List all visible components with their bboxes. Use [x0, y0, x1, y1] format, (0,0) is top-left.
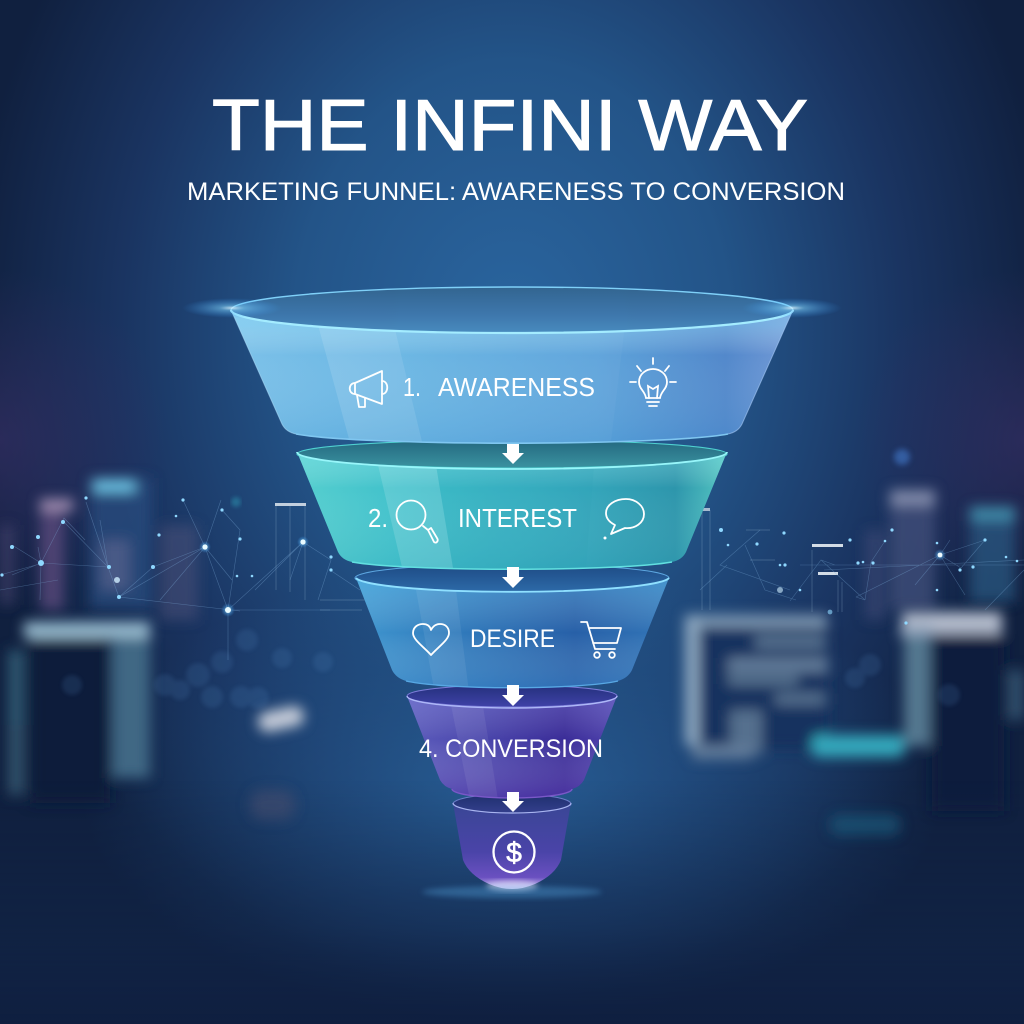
funnel stage 3: desire [354, 568, 670, 688]
bokeh lights [62, 629, 960, 709]
funnel stage 2: interest [297, 440, 727, 580]
icon: magnifying glass [396, 500, 438, 543]
network lines [0, 500, 360, 660]
icon: dollar coin: $ [506, 837, 522, 868]
blurred buildings [0, 478, 1015, 620]
label: awareness: AWARENESS [438, 372, 595, 402]
label: number 1: 1. [403, 372, 421, 402]
subtitle: MARKETING FUNNEL: AWARENESS TO CONVERSION [187, 178, 845, 206]
icon: heart [413, 624, 449, 655]
arrows between stages [502, 444, 524, 812]
label: interest: INTEREST [458, 503, 577, 533]
funnel stage 4: conversion [407, 685, 617, 800]
funnel stage 5: payoff cup [422, 794, 602, 898]
funnel stage 1: awareness [130, 287, 894, 450]
label: 4. conversion: 4. CONVERSION [419, 735, 603, 763]
icon: speech bubble [604, 499, 644, 540]
icon: megaphone [350, 371, 387, 407]
network nodes [0, 496, 1018, 625]
label: desire: DESIRE [470, 625, 555, 653]
sharp distant buildings [276, 506, 842, 612]
label: number 2: 2. [368, 503, 388, 533]
icon: shopping cart [581, 622, 621, 658]
lens flares on rim [130, 298, 894, 318]
title: THE INFINI WAY [212, 86, 808, 166]
icon: light bulb [630, 358, 676, 406]
icon: dollar coin [494, 832, 534, 872]
